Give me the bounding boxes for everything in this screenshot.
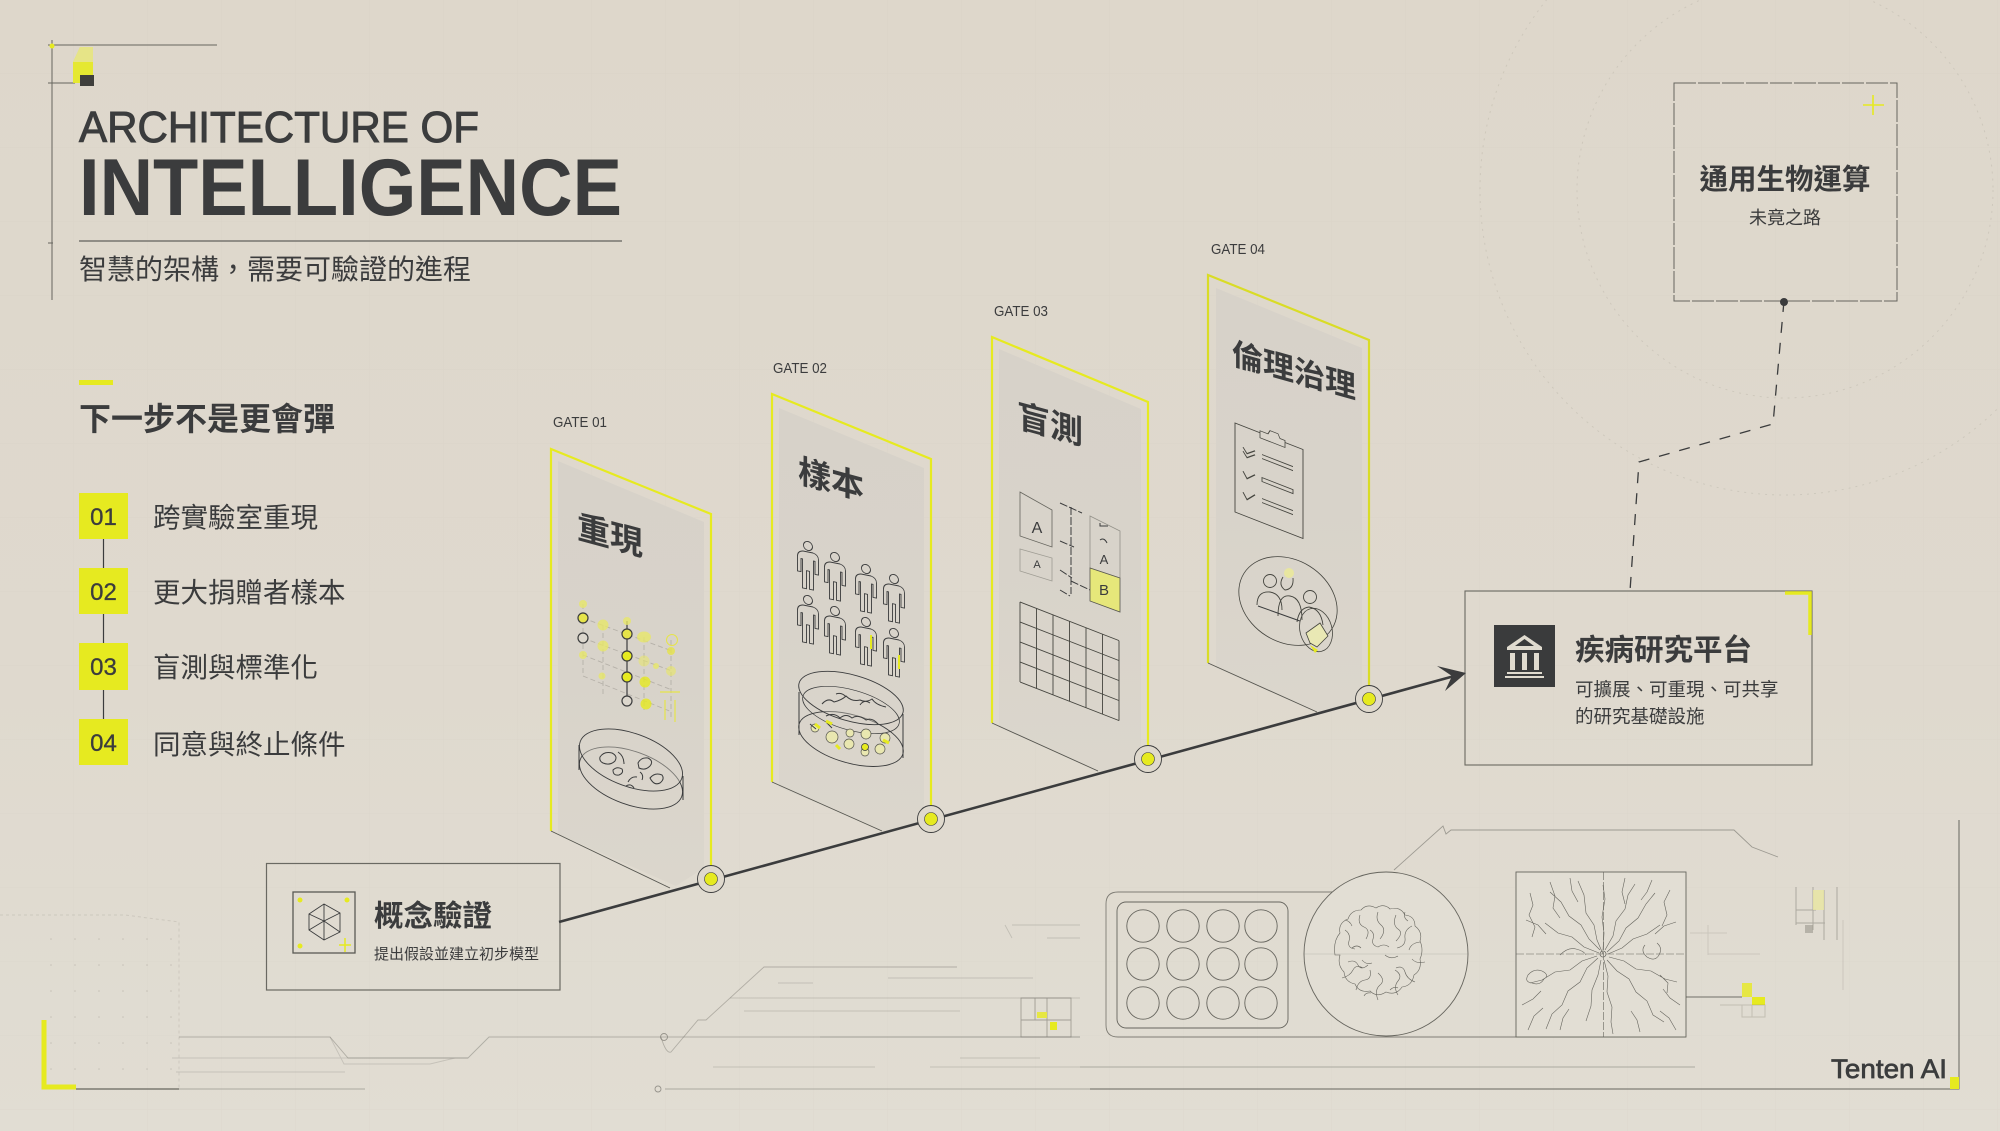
blueprint: bottom frame right — [1080, 820, 1959, 1089]
goal heading: 通用生物運算 — [1699, 164, 1871, 196]
panel: gate 01 — [551, 415, 711, 888]
panel: general biological computing — [1674, 83, 1897, 301]
icon: donor figures — [798, 539, 904, 678]
gate 02 heading: 樣本 — [798, 453, 864, 508]
platform description: 的研究基礎設施 — [1575, 706, 1705, 727]
blueprint: circuit traces — [172, 925, 1090, 1092]
icon: blind A/B cards: A — [1032, 520, 1043, 537]
list item 01: 跨實驗室重現 — [153, 502, 318, 533]
icon: institution building — [1494, 625, 1555, 687]
gate node 03 — [1134, 746, 1162, 772]
gate node 04 — [1356, 686, 1382, 712]
gate 02 label: GATE 02 — [773, 361, 827, 377]
list item 02: 更大捐贈者樣本 — [153, 577, 346, 608]
title block — [48, 40, 622, 300]
icon: blind A/B cards: A — [1033, 559, 1041, 571]
poc heading: 概念驗證 — [374, 899, 493, 933]
gate 03 heading: 盲測 — [1017, 398, 1083, 453]
icon: clipboard checklist — [1235, 417, 1303, 539]
gate node 01 — [698, 866, 724, 892]
list item 01 — [79, 493, 318, 539]
gate node 02 — [918, 806, 944, 832]
panel: gate 02 — [772, 361, 931, 832]
highlighted card B: B — [1099, 582, 1109, 599]
gate 04 heading: 倫理治理 — [1232, 336, 1356, 406]
list item 02: 02 — [90, 579, 117, 606]
blueprint: upper trace lines — [1394, 826, 1778, 870]
dashed connector — [1630, 298, 1788, 591]
list item 01: 01 — [90, 504, 117, 531]
blueprint: radial tissue square — [1516, 872, 1686, 1037]
blueprint: small grid fragments — [1686, 887, 1843, 1017]
gate 01 label: GATE 01 — [553, 415, 607, 431]
panel: gate 04 — [1208, 242, 1369, 713]
yellow plus mark — [1863, 95, 1884, 115]
heading: architecture of: ARCHITECTURE OF — [79, 104, 479, 152]
blueprint: bottom-left corner — [0, 915, 179, 1089]
icon: blind A/B cards — [1020, 492, 1120, 721]
list item 03: 03 — [90, 654, 117, 681]
gate 03 label: GATE 03 — [994, 304, 1048, 320]
platform description: 可擴展、可重現、可共享 — [1575, 679, 1779, 700]
gate 04 label: GATE 04 — [1211, 242, 1265, 258]
heading: intelligence: INTELLIGENCE — [79, 143, 622, 233]
platform heading: 疾病研究平台 — [1575, 633, 1752, 667]
list item 04: 同意與終止條件 — [153, 729, 346, 760]
blueprint: organoid circle — [1304, 872, 1468, 1036]
icon: blind A/B cards: A — [1100, 552, 1109, 567]
yellow corner bracket — [1785, 593, 1810, 635]
icon: sample dish — [792, 661, 910, 777]
blueprint: well plate — [1106, 892, 1686, 1037]
progress arrow — [559, 666, 1466, 922]
list item 03: 盲測與標準化 — [153, 652, 318, 683]
icon: ethics committee — [1222, 539, 1354, 663]
goal subtitle: 未竟之路 — [1749, 208, 1821, 228]
icon: assay grid — [1020, 602, 1119, 721]
list item 03 — [79, 643, 318, 690]
brand logo: Tenten AI — [1831, 1054, 1947, 1084]
list item 02 — [79, 568, 346, 614]
panel: gate 03 — [992, 304, 1148, 773]
icon: cell network — [578, 600, 680, 722]
decorative concentric arcs — [1480, 0, 2000, 495]
icon: cube — [293, 892, 355, 953]
list item 04: 04 — [90, 730, 117, 757]
gate 01 heading: 重現 — [577, 509, 643, 564]
highlighted card B — [1090, 568, 1120, 612]
panel: proof of concept — [266, 864, 560, 990]
poc description: 提出假設並建立初步模型 — [374, 946, 539, 963]
corner registration marks — [48, 40, 217, 300]
panel: disease research platform — [1465, 591, 1812, 765]
panel: next-step list — [79, 380, 346, 765]
subtitle: 智慧的架構，需要可驗證的進程 — [79, 254, 471, 285]
arrowhead — [1437, 666, 1466, 691]
icon: petri dish — [571, 717, 691, 821]
list heading: 下一步不是更會彈 — [79, 401, 335, 437]
list item 04 — [79, 719, 346, 765]
